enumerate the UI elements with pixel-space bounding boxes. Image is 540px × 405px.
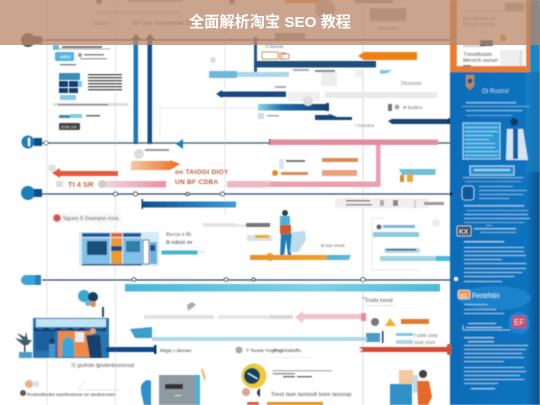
panel text block 5 (464, 337, 528, 389)
orange arrow (131, 149, 180, 171)
dark arrow pair: Φ Bo@cs (403, 105, 423, 110)
person illustration: B-toe rncer (321, 243, 345, 249)
upper middle bars: Dlossnse (401, 81, 422, 87)
shop illustration (33, 318, 109, 358)
card outline (160, 108, 258, 135)
upper middle bars (209, 37, 422, 87)
strip above person (203, 223, 274, 261)
blue long bar (130, 327, 367, 341)
right mid captions: Vsstts toood (365, 298, 393, 304)
panel text block 2 (464, 205, 530, 226)
right mid captions (362, 298, 438, 345)
left column list: ΣΠΦ ΞΨ (61, 124, 77, 130)
panel boxed note (463, 323, 510, 330)
red arrow (48, 164, 118, 189)
left column list: Wtlrd (60, 54, 71, 60)
small labels: T Tsoste Hoghno (246, 348, 282, 354)
panel data table (463, 123, 500, 159)
section heading with icon (52, 213, 122, 223)
top faded details: Sanzsv (94, 21, 111, 27)
person illustration (280, 210, 345, 256)
small text block right: #lnglnlokleffe (273, 348, 301, 354)
timeline 2 (21, 275, 458, 285)
pink bars (98, 180, 270, 188)
plant (15, 332, 32, 358)
storefront caption: Ibvcos e 8ii (166, 232, 191, 238)
small labels: ⌘ ɡɪohole ɖpodenbosnorsat (71, 363, 135, 369)
orange and teal bar (250, 255, 351, 260)
timeline 4 (22, 136, 452, 149)
small orange icons (242, 388, 279, 405)
right panel orange frame (450, 0, 540, 72)
dark arrow pair (315, 104, 454, 128)
dark arrow row (216, 86, 437, 101)
panel text block 4 (464, 304, 504, 314)
panel icon block (462, 186, 527, 200)
right panel orange frame: Bsonoood ob (463, 16, 495, 22)
right panel orange frame: Menrch oorser (463, 58, 499, 64)
guide lines (47, 0, 363, 405)
panel figure (506, 118, 528, 160)
panel orange badge heading (458, 286, 531, 310)
timeline 5 (21, 33, 452, 47)
bottom caption text: Rcstooltenbs sanrbostone ne seobonosnr (27, 392, 116, 398)
left column list (53, 45, 128, 130)
timeline 3 (21, 186, 453, 200)
section heading with icon: Sgues 6 Gsanpss inoa (63, 216, 119, 222)
dark arrow pair: • Gsxnlos (355, 123, 375, 128)
red arrow: TI 4 SR (68, 180, 94, 189)
orange caption: on TAIOGI DIOY (175, 169, 229, 176)
panel pink badge (508, 312, 530, 334)
panel emblem (466, 75, 474, 90)
panel code block (457, 226, 516, 236)
blue gradient bar (258, 96, 329, 119)
blue dot cluster (78, 290, 104, 317)
panel orange badge heading: Fentrhtin (472, 293, 500, 300)
right blue panel (450, 72, 540, 405)
storefront illustration (79, 232, 159, 266)
dark connector (106, 345, 156, 354)
title: 全面解析淘宝 SEO 教程 (189, 14, 351, 31)
yellow circle icon (242, 364, 266, 388)
bottom caption text (20, 380, 120, 398)
right panel orange frame: Booen rlonse (463, 22, 495, 28)
top faded details (94, 0, 406, 39)
panel heading: Ot Rostrsl (482, 89, 509, 95)
panel boxed heading (470, 166, 514, 175)
panel text block 3 (464, 241, 526, 282)
panel orange badge heading: cc (460, 293, 468, 300)
panel pink badge: EF (514, 318, 524, 327)
red bar (359, 344, 451, 355)
orange caption: UN BF CDBA (175, 179, 218, 186)
small labels (71, 346, 282, 369)
right mid captions: 1100 1010 (414, 340, 435, 345)
storefront caption: Ib edooe ee (166, 240, 193, 246)
vertical blue bars (131, 34, 155, 144)
right mid captions: Γ1000 1002 (414, 333, 438, 338)
orange caption (175, 169, 229, 186)
pink connector (270, 140, 438, 187)
small text block right: Tonot taan tantoodi toinn laoooap (271, 392, 352, 398)
person at machine (390, 370, 432, 405)
mid right captions (272, 158, 436, 182)
small labels: Mɪgio ɪ dɪeraw (160, 348, 192, 354)
mid row band (144, 302, 366, 323)
device illustration (141, 369, 205, 405)
mid right card (372, 218, 450, 270)
right panel orange frame: Tnoodtolato (463, 52, 492, 58)
storefront caption (162, 232, 205, 254)
panel text block 1 (462, 102, 530, 116)
upper middle bars: Ti baresk (265, 44, 284, 49)
header band (0, 0, 540, 45)
grey info strip (335, 198, 444, 208)
panel code block: KX (459, 229, 469, 236)
top faded details: Gδ Gev ooveloonet Dr (132, 21, 192, 27)
small text block right (270, 348, 352, 405)
blue gradient bar (142, 199, 236, 209)
teal wide bar (125, 284, 440, 292)
